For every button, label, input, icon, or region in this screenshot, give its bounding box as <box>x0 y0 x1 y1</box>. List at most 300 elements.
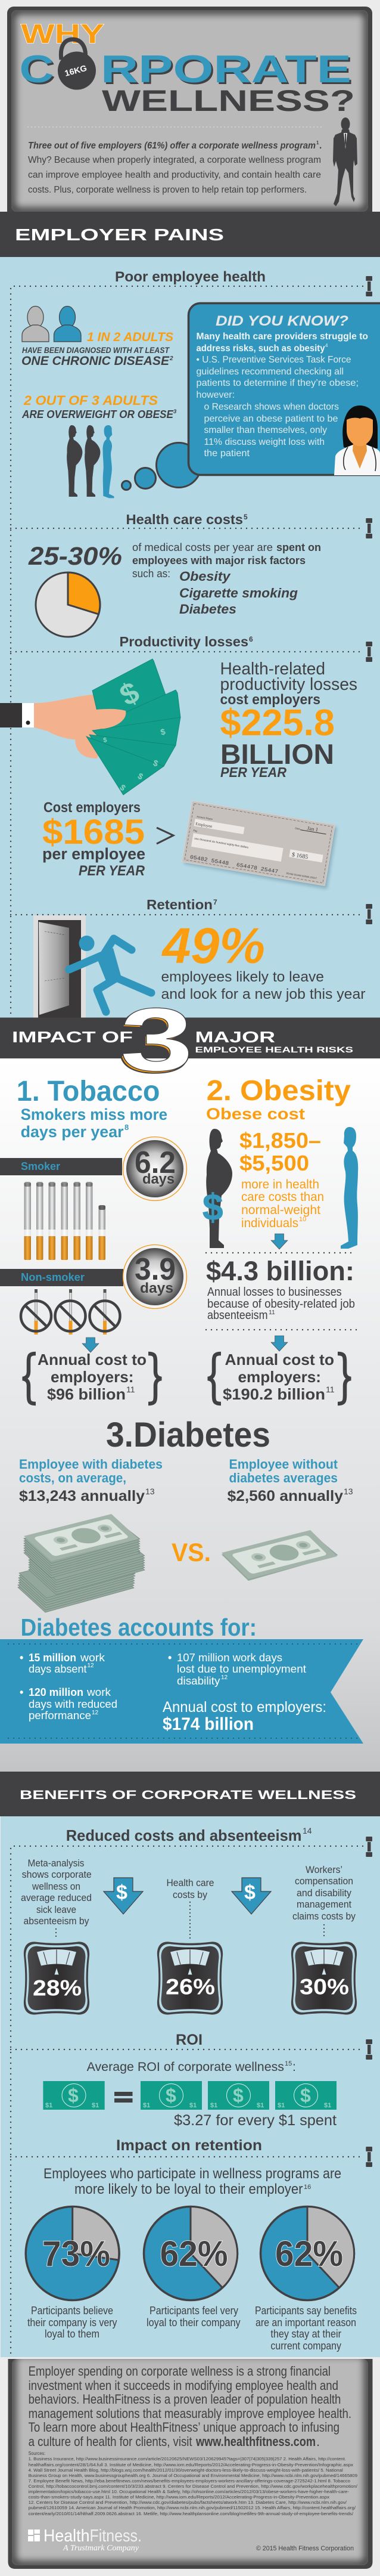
title word: corporate C: C <box>21 49 56 92</box>
heading: reduced costs: 14 <box>303 1826 312 1835</box>
heading: impact of 3 major risks: IMPACT OF <box>12 1028 133 1046</box>
text block: one in two adults <box>21 330 173 368</box>
text block: medical cost description: spent on <box>276 541 321 553</box>
label bar: smoker <box>0 1158 122 1175</box>
panel: diabetes ribbon <box>0 1639 363 1744</box>
text block: obesity absenteeism: $4.3 billion: <box>206 1256 354 1286</box>
callout heading: DID YOU KNOW? <box>216 313 348 329</box>
heading: diabetes accounts for: Diabetes accounts for: <box>21 1614 257 1641</box>
list: left column: 15 million <box>29 1652 76 1664</box>
text block: retention figure: 49% <box>161 918 265 974</box>
caption: third pie: they stay at their <box>270 2328 341 2340</box>
text: versus: VS. <box>172 1538 211 1567</box>
text block: productivity cost: $225.8 <box>220 702 335 744</box>
pie chart: 62 percent feel loyal: 62% <box>160 2234 228 2274</box>
heading: tobacco: Smokers miss more <box>21 1106 167 1123</box>
text block: workers compensation: claims costs by <box>292 1911 356 1922</box>
heading: tobacco: 1. Tobacco <box>17 1076 160 1107</box>
text block: medical cost description: Cigarette smoking <box>179 586 298 600</box>
divider: header dots <box>28 126 322 128</box>
list: left column: work <box>86 1686 111 1698</box>
text block: employee without diabetes: 13 <box>344 1487 353 1496</box>
text block: employee with diabetes <box>19 1457 163 1504</box>
callout text: Many health care providers struggle to <box>197 332 368 342</box>
list: right column: 12 <box>221 1674 228 1681</box>
text block: productivity cost: productivity losses <box>220 675 357 694</box>
bill three: $ <box>300 2085 311 2106</box>
panel: benefits background <box>1 1816 380 2357</box>
text block: obese cost figures: normal-weight <box>241 1203 320 1217</box>
list: right column: lost due to unemployment <box>177 1663 306 1675</box>
list: right column: • <box>168 1652 172 1664</box>
icon: scale 30 percent: 30% <box>300 1975 349 1999</box>
text: average ROI: Average ROI of corporate wellness <box>87 2060 284 2074</box>
heading: tobacco <box>17 1076 167 1141</box>
heading: health care costs: 5 <box>244 513 248 521</box>
thumb <box>80 709 126 729</box>
caption: first pie: loyal to them <box>45 2328 99 2340</box>
heading: retention <box>11 897 372 924</box>
heading: impact of 3 major risks: EMPLOYEE HEALTH RISKS <box>195 1045 353 1054</box>
text block: cost per employee: PER YEAR <box>79 863 145 879</box>
icon: paycheck: Pay <box>193 829 198 832</box>
panel: header frame <box>7 7 372 221</box>
callout text: smaller than themselves, only <box>204 425 327 435</box>
icon: seven cigarettes <box>24 1182 105 1260</box>
text block: intro: Three out of five employers (61%) offer a corporate wellness program <box>28 141 316 151</box>
text block: obese cost figures <box>239 1128 324 1230</box>
dollar signs on cash: $ <box>114 675 145 713</box>
icon: scale 28 percent <box>24 1942 89 2015</box>
heading: tobacco: days per year <box>21 1123 124 1141</box>
callout text <box>197 332 368 459</box>
divider: obesity two <box>206 1329 359 1330</box>
callout text: 11% discuss weight loss with <box>204 437 325 447</box>
text block: productivity cost: BILLION <box>220 738 334 770</box>
text block: productivity cost: PER YEAR <box>220 764 286 780</box>
icon: overweight silhouette with dollar sign: $ <box>203 1187 223 1228</box>
heading: tobacco: 8 <box>124 1123 129 1132</box>
text block: medical cost description <box>132 541 321 617</box>
logo tagline: A Trustmark Company <box>63 2544 139 2553</box>
heading: obesity <box>206 1075 351 1123</box>
text block: workers compensation <box>292 1864 356 1939</box>
icon: paycheck: 05482 55448 <box>189 854 229 867</box>
bill three <box>275 2081 337 2110</box>
icon: one dollar bill: $1 <box>92 2102 99 2109</box>
text: average ROI: : <box>292 2060 296 2074</box>
text block: cost per employee: per employee <box>42 845 145 863</box>
text block: sick leave: Meta-analysis <box>27 1857 85 1869</box>
title word: corporate RPORATE: RPORATE <box>102 49 353 92</box>
dollar signs on cash <box>102 675 167 792</box>
icon: 6.2 days badge <box>123 1137 187 1201</box>
text block: sources: healthaffairs.org/content/28/1/64.full 3. Institute of Medicine, http://www.iom.edu/Reports/2012/Accelerating-Progress-in-Obesity-Prevention/Infographic.aspx <box>29 2462 353 2467</box>
bill two: $1 <box>210 2102 217 2109</box>
text block: employee without diabetes: $2,560 annually <box>228 1488 343 1504</box>
bill three: $1 <box>324 2102 331 2109</box>
list: left column: days absent <box>29 1663 87 1675</box>
callout: tobacco annual cost: employers: <box>51 1368 133 1386</box>
heading: benefits of corporate wellness band <box>0 1772 380 1816</box>
heading: health care costs <box>11 512 372 538</box>
text block: intro: 1 <box>316 140 319 145</box>
list: right column: disability <box>177 1675 220 1687</box>
text block: productivity cost: cost employers <box>220 692 320 708</box>
pie chart: 73 percent: 73% <box>42 2234 110 2274</box>
pie chart: 62 percent benefits <box>261 2206 354 2301</box>
icon: scale 26 percent <box>157 1942 223 2015</box>
pie chart: 62 percent feel loyal <box>144 2206 238 2301</box>
list: left column: work <box>80 1652 105 1664</box>
text block: sick leave: absenteeism by <box>24 1915 89 1927</box>
heading: ROI <box>11 2032 372 2060</box>
title word: why: WHY <box>21 18 104 49</box>
arrow: obesity down one <box>271 1234 288 1249</box>
text block: obesity absenteeism: Annual losses to businesses <box>207 1286 342 1299</box>
heading: retention: 7 <box>213 898 217 906</box>
icon: one dollar bill: $1 <box>45 2102 52 2109</box>
icon: 6.2 days badge: 6.2 <box>135 1145 176 1180</box>
icon: no smoking signs <box>21 1289 120 1335</box>
text block: one in two adults: 1 IN 2 ADULTS <box>87 330 173 344</box>
text block: sources: 7. Employee Benefit News, http://eba.benefitnews.com/news/benefits-employees-employers-workers-ancillary-offerings-coverage-2725242-1.html 8. Tobacco <box>29 2478 350 2484</box>
callout text: address risks, such as obesity <box>197 343 325 354</box>
icon: scale 30 percent <box>291 1942 357 2015</box>
text block: retention figure: employees likely to leave <box>161 969 324 985</box>
caption: third pie: are an important reason <box>256 2317 356 2329</box>
list: left column <box>20 1652 117 1722</box>
heading: retention: Retention <box>147 897 213 912</box>
text block: medical cost description: of medical costs per year are <box>132 541 273 553</box>
callout text: however: <box>197 390 235 400</box>
text block: loyalty intro: more likely to be loyal to their employer <box>74 2181 303 2197</box>
panel: did you know <box>122 303 380 490</box>
caption: third pie: current company <box>270 2340 341 2352</box>
arrow: dollar down one <box>104 1878 143 1914</box>
text block: workers compensation: compensation <box>295 1875 353 1887</box>
list: right column <box>168 1652 306 1687</box>
text block: employee without diabetes <box>228 1457 353 1504</box>
bill one: $ <box>166 2085 176 2106</box>
big number three: 3 <box>120 989 194 1089</box>
text block: two out of three adults: 2 OUT OF 3 ADULTS <box>23 393 158 408</box>
text: ROI figure: $3.27 for every $1 spent <box>174 2112 337 2129</box>
heading: productivity losses: Productivity losses <box>119 634 248 649</box>
dollar signs on cash: $ <box>118 782 127 792</box>
sleeve <box>0 703 34 727</box>
text block: productivity cost: Health-related <box>220 660 325 679</box>
icon: businessman silhouette <box>333 117 357 206</box>
heading: benefits of corporate wellness band: BENEFITS OF CORPORATE WELLNESS <box>20 1788 356 1802</box>
list: right column: 107 million work days <box>177 1652 282 1664</box>
title <box>19 18 355 117</box>
label bar: non-smoker <box>0 1269 123 1286</box>
text block: obese cost figures: more in health <box>241 1178 319 1191</box>
text block: intro: costs. Plus, corporate wellness is proven to help retain top performers. <box>28 185 307 195</box>
heading: reduced costs: Reduced costs and absenteeism <box>66 1826 301 1844</box>
dollar signs on cash: $ <box>160 726 167 737</box>
logo: healthfitness <box>28 2527 142 2553</box>
text block: medical cost description: Obesity <box>179 569 231 584</box>
text block: closing statement: www.healthfitness.com <box>195 2434 316 2449</box>
heading: employer pains band <box>0 212 380 257</box>
text block: obesity absenteeism <box>206 1256 355 1322</box>
icon: one dollar bill <box>43 2081 105 2110</box>
callout text: perceive an obese patient to be <box>204 414 338 424</box>
list: left column: 120 million <box>29 1686 83 1698</box>
label bar: non-smoker: Non-smoker <box>21 1271 85 1283</box>
text block: sick leave <box>21 1857 92 1939</box>
text block: workers compensation: and disability <box>297 1887 351 1899</box>
caption: second pie: Participants feel very <box>149 2305 238 2317</box>
text block: one in two adults: ONE CHRONIC DISEASE <box>21 354 170 368</box>
heading: reduced costs <box>14 1826 372 1857</box>
text block: two out of three adults: ARE OVERWEIGHT OR OBESE <box>21 408 174 420</box>
text block: sources: 1. Business Insurance, http://www.businessinsurance.com/article/20120625/NEWS03/120629945?tags=|307|74|305|339|257 2. Health Affairs, http://content. <box>29 2456 346 2462</box>
text block: employee with diabetes: 13 <box>145 1487 155 1496</box>
bill one <box>141 2081 202 2110</box>
text block: retention figure: and look for a new job this year <box>161 986 366 1002</box>
text block: intro: can improve employee health and productivity, and contain health care <box>28 170 321 180</box>
icon: overweight silhouette with dollar sign <box>203 1129 232 1248</box>
text block: sources: Sources: <box>29 2451 45 2456</box>
text block: closing statement: a culture of health for clients, visit <box>29 2434 192 2449</box>
text block: sick leave: sick leave <box>36 1904 76 1915</box>
text block: medical cost description: Diabetes <box>179 602 236 617</box>
bill two: $ <box>233 2085 244 2106</box>
arrow: dollar down one: $ <box>116 1881 127 1904</box>
pie chart: 73 percent <box>26 2206 119 2301</box>
text block: employee without diabetes: diabetes averages <box>229 1470 338 1485</box>
caption: first pie: Participants believe <box>31 2305 113 2317</box>
text block: retention figure <box>161 918 366 1002</box>
icon: kettlebell: 16KG <box>64 63 88 78</box>
text: annual cost of diabetes <box>163 1699 326 1734</box>
logo mark <box>28 2529 40 2541</box>
text block: obesity absenteeism: because of obesity-related job <box>207 1298 355 1311</box>
callout: obesity annual cost <box>208 1351 351 1404</box>
icon: one dollar bill: $ <box>68 2085 79 2106</box>
callout: tobacco annual cost: 11 <box>126 1385 135 1394</box>
icon: paycheck: Jan 1 <box>307 825 319 833</box>
heading: obesity: Obese cost <box>206 1105 305 1123</box>
text block: employee with diabetes: Employee with diabetes <box>19 1457 163 1472</box>
icon: three body silhouettes <box>67 425 114 498</box>
list: left column: • <box>20 1686 23 1698</box>
heading: obesity: 2. Obesity <box>207 1075 351 1107</box>
arrow: dollar down two: $ <box>244 1881 256 1904</box>
callout text: guidelines recommend checking all <box>197 367 344 377</box>
arrow: tobacco down <box>82 1337 99 1352</box>
text block: workers compensation: management <box>297 1899 351 1910</box>
text block: cost per employee: Cost employers <box>43 800 141 816</box>
heading: productivity losses: 6 <box>249 635 253 643</box>
text block: employee with diabetes: $13,243 annually <box>19 1488 145 1504</box>
callout: obesity annual cost: employers: <box>238 1368 321 1386</box>
title word: wellness: WELLNESS? <box>102 84 355 117</box>
icon: 3.9 days badge: 3.9 <box>135 1252 176 1287</box>
icon: paycheck <box>182 801 337 889</box>
text block: two out of three adults: 3 <box>173 408 177 415</box>
arrow: obesity down two <box>271 1336 288 1351</box>
caption: second pie: loyal to their company <box>147 2317 241 2329</box>
panel: footer frame <box>8 2352 373 2569</box>
text block: health care costs reduced: costs by <box>173 1889 207 1900</box>
text block: sources: Control, http://tobaccocontrol.bmj.com/content/10/3/233.abstract 9. Centers for Disease Control and Prevention, http://www.cdc.gov/workplacehealthpromotion/ <box>29 2484 358 2489</box>
text block: sources: 4. Wall Street Journal Health Blog, http://blogs.wsj.com/health/2012/01/30/overweight-doctors-less-likely-to-discuss-weight-loss-with-patients/ 5. National <box>29 2467 343 2473</box>
bill two <box>208 2081 269 2110</box>
text block: closing statement <box>29 2364 351 2449</box>
text block: obesity absenteeism: absenteeism <box>207 1309 268 1322</box>
heading: ROI: ROI <box>176 2032 203 2048</box>
icon: paycheck: $ 1685 <box>291 852 309 860</box>
text block: employee with diabetes: costs, on average, <box>19 1470 126 1485</box>
title word: corporate C: C <box>19 47 54 91</box>
logo: healthfitness: Fitness. <box>89 2527 142 2546</box>
text block: loyalty intro: 16 <box>304 2184 311 2191</box>
heading: productivity losses <box>11 634 372 662</box>
list: left column: 12 <box>87 1662 94 1669</box>
title word: corporate RPORATE: RPORATE <box>101 47 351 91</box>
dollar signs on cash: $ <box>136 771 145 782</box>
text block: intro: Why? Because when properly integrated, a corporate wellness program <box>28 155 321 165</box>
callout: obesity annual cost: $190.2 billion <box>223 1385 325 1403</box>
big number three: 3 <box>118 991 192 1091</box>
caption: third pie <box>255 2305 357 2352</box>
list: left column: days with reduced <box>29 1698 117 1710</box>
text block: sources: costs-than-smokers-study-says.aspx 11. Institute of Medicine, http://www.iom.edu/Reports/2012/Accelerating-Progress-in-Obesity-Prevention.aspx <box>29 2494 329 2500</box>
text block: sources: 12. Centers for Disease Control and Prevention, http://www.cdc.gov/diabetes/pubs/factsheets/atwork.htm 13. Diabetes Care, http://www.ncbi.nlm.nih.gov/ <box>29 2500 347 2505</box>
icon: 3.9 days badge <box>123 1245 187 1308</box>
bill one: $1 <box>189 2102 197 2109</box>
icon: scale 28 percent: 28% <box>33 1976 82 2000</box>
big number three <box>118 989 194 1091</box>
divider: benefits vertical dots <box>10 1849 11 2355</box>
icon: hand holding cash <box>0 659 180 795</box>
caption: second pie <box>147 2305 241 2329</box>
text: annual cost of diabetes: $174 billion <box>163 1714 254 1734</box>
text block: sources: Business Group on Health, www.businessgrouphealth.org 6. Journal of Occupational and Environmental Medicine, http://www.ncbi.nlm.nih.gov/pubmed/14665809 <box>29 2473 357 2478</box>
icon: paycheck: Employee <box>195 822 213 829</box>
panel: health risks background <box>0 1058 380 1772</box>
bill two: $1 <box>257 2102 264 2109</box>
text block: medical cost description: such as: <box>132 568 170 580</box>
caption: first pie <box>27 2305 117 2340</box>
text: annual cost of diabetes: Annual cost to employers: <box>163 1699 326 1716</box>
heading: poor employee health <box>14 269 372 296</box>
text block: health care costs reduced: Health care <box>167 1877 214 1888</box>
text block: intro: . <box>319 141 322 151</box>
text block: obesity absenteeism: 11 <box>269 1309 275 1316</box>
text block: cost per employee <box>42 800 145 879</box>
text: copyright: © 2015 Health Fitness Corporation <box>256 2545 354 2552</box>
icon: paycheck: Date <box>295 826 301 831</box>
icon: paycheck: Account Payee <box>197 815 213 821</box>
text block: employee without diabetes: Employee without <box>229 1457 338 1472</box>
text block: 25-30 percent: 25-30% <box>28 542 122 571</box>
pie chart: 62 percent benefits: 62% <box>275 2234 343 2274</box>
icon: 6.2 days badge: days <box>142 1171 175 1187</box>
callout: tobacco annual cost: Annual cost to <box>38 1351 147 1368</box>
callout box <box>188 303 380 475</box>
list: left column: 12 <box>92 1710 99 1716</box>
heading: impact of 3 major risks <box>0 989 380 1091</box>
list: left column: performance <box>29 1710 91 1722</box>
text block: obese cost figures: $1,850– <box>239 1128 321 1153</box>
icon: single bill <box>222 1530 338 1581</box>
icon: paycheck: one thousand six hundred eighty-five dollars <box>194 837 249 849</box>
icon: equals sign <box>114 2092 132 2103</box>
callout text: 4 <box>325 343 328 348</box>
callout text: patients to determine if they’re obese; <box>197 378 359 388</box>
callout: tobacco annual cost: $96 billion <box>47 1385 126 1403</box>
caption: first pie: their company is very <box>27 2317 117 2329</box>
heading: health care costs: Health care costs <box>126 512 243 527</box>
arrow: dollar down two <box>232 1878 271 1914</box>
callout: obesity annual cost: Annual cost to <box>225 1351 334 1368</box>
panel: employer pains background <box>0 257 380 422</box>
text block: two out of three adults <box>21 393 177 420</box>
icon: 3.9 days badge: days <box>140 1280 173 1296</box>
heading: employer pains band: EMPLOYER PAINS <box>15 225 224 244</box>
divider: obesity one <box>206 1252 354 1253</box>
list: left column: • <box>20 1652 23 1664</box>
text block: one in two adults: 2 <box>169 355 173 362</box>
bill one: $1 <box>143 2102 150 2109</box>
caption: third pie: Participants say benefits <box>255 2305 357 2317</box>
divider: left vertical dots <box>10 289 11 1015</box>
text block: sources: implementation/topics/tobacco-use.html 10. Occupational Health & Safety, http://ohsonline.com/articles/2012/03/13/obese-workers-have-higher-health-care- <box>29 2489 350 2494</box>
text block: sick leave: average reduced <box>21 1892 92 1903</box>
icon: doctor <box>334 405 380 475</box>
icon: scale 26 percent: 26% <box>166 1975 215 1999</box>
callout text: the patient <box>204 448 250 459</box>
icon: three dollar bills <box>141 2081 337 2110</box>
callout text: o Research shows when doctors <box>204 402 339 412</box>
text block: workers compensation: Workers’ <box>306 1864 342 1875</box>
icon: paycheck: 55448 55448 65598 25547 <box>286 872 317 880</box>
text block: health care costs reduced <box>167 1877 214 1939</box>
callout: tobacco annual cost <box>23 1351 161 1404</box>
heading: diabetes: 3.Diabetes <box>106 1416 270 1454</box>
cash fan <box>86 659 180 795</box>
heading: impact on retention <box>11 2137 372 2167</box>
icon: normal-weight silhouette <box>341 1127 358 1249</box>
text block: sources: pubmed/12610059 14. American Journal of Health Promotion, http://www.ncbi.nlm.nih.gov/pubmed/11502012 15. Health Affairs, http://content.healthaffairs.org/ <box>29 2505 356 2510</box>
text block: obese cost figures: individuals <box>241 1216 298 1230</box>
icon: paycheck: 654478 25447 <box>236 862 279 875</box>
icon: two adults <box>22 306 81 342</box>
text block: sources <box>29 2451 358 2516</box>
text block: cost per employee: $1685 <box>42 813 145 852</box>
hand <box>34 695 125 758</box>
text block: medical cost description: employees with major risk factors <box>132 555 306 566</box>
arrow: greater than <box>157 828 173 844</box>
bill three: $1 <box>278 2102 285 2109</box>
text block: sick leave: shows corporate <box>22 1869 92 1880</box>
text block: one in two adults: HAVE BEEN DIAGNOSED WITH AT LEAST <box>22 346 170 355</box>
heading: poor employee health: Poor employee health <box>115 269 266 285</box>
text block: obese cost figures: 10 <box>299 1216 306 1223</box>
speech bubbles <box>122 442 201 490</box>
text block: sources: content/early/2010/01/14/hlthaff.2009.0626.abstract 16. Metlife, http://www.healthplansonline.com/blog/metlifes-9th-annual-study-of-employee-benefits-trends/ <box>29 2511 354 2516</box>
icon: stack of bills <box>18 1514 145 1612</box>
text: average ROI: 15 <box>285 2060 292 2067</box>
icon: person running out the door <box>33 915 151 1018</box>
icon: kettlebell <box>58 39 96 89</box>
callout: obesity annual cost: 11 <box>326 1385 335 1394</box>
